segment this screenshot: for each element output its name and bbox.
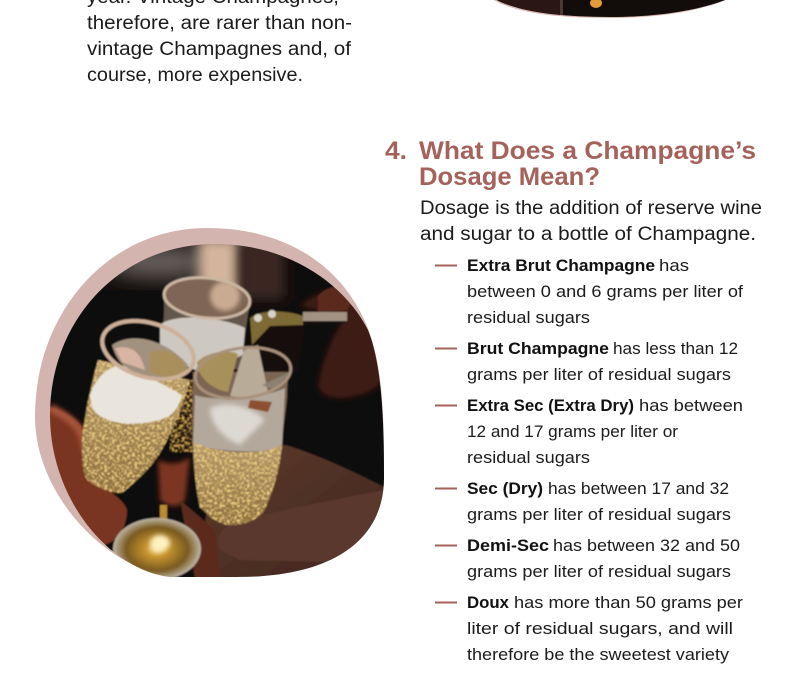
item: Doux: has more than 50 grams per [514,594,744,612]
right glass [192,372,288,525]
paragraph: vintage Champagnes: course, more expensive. [87,65,303,86]
item: Doux [435,594,744,664]
item: Demi-Sec: Demi-Sec [467,537,549,555]
heading: What Does a Champagne’s [419,137,756,165]
paragraph: vintage Champagnes: therefore, are rarer than non- [87,13,352,34]
photo: top cropped blob image [494,0,726,18]
pink blob backing [35,228,384,577]
item: Doux: therefore be the sweetest variety [467,646,730,664]
item: Brut [435,340,738,384]
bottle [249,312,346,374]
item: Demi-Sec: has between 32 and 50 [553,537,740,555]
paragraph: vintage Champagnes [87,0,352,86]
item: Demi-Sec [435,537,740,581]
paragraph: vintage Champagnes: vintage Champagnes and, of [87,39,352,60]
item: Extra Brut: residual sugars [467,309,590,327]
item: Brut: grams per liter of residual sugars [467,366,731,384]
heading [419,137,756,191]
item: Sec [435,480,731,524]
item: Extra Brut: Extra Brut Champagne [467,257,655,275]
item: Doux: liter of residual sugars, and will [467,620,733,638]
item: Sec: grams per liter of residual sugars [467,506,731,524]
heading: Dosage Mean? [419,163,600,191]
backdrop lights [105,248,215,276]
item: Extra Brut: between 0 and 6 grams per liter of [467,283,743,301]
intro text: and sugar to a bottle of Champagne. [420,224,756,245]
intro text: Dosage is the addition of reserve wine [420,198,762,219]
hands [300,289,385,398]
stem and ball [158,504,168,520]
item: Extra Sec [435,397,743,467]
gold sliver between glasses [170,380,194,452]
back glass [162,300,250,370]
item: Brut: has less than 12 [613,340,738,358]
intro text [420,198,762,245]
item: Brut: Brut Champagne [467,340,609,358]
gold inside right rim [197,352,238,392]
item: Sec: has between 17 and 32 [548,480,729,498]
item: Demi-Sec: grams per liter of residual sugars [467,563,731,581]
left glass [82,360,190,493]
item: Doux: Doux [467,594,510,612]
photo: champagne glasses toasting [35,228,390,585]
list: dosage levels [435,257,744,664]
item: Sec: Sec (Dry) [467,480,543,498]
section number: 4. [385,137,407,165]
item: Extra Sec: residual sugars [467,449,590,467]
item: Extra Brut: has [659,257,689,275]
item: Extra Sec: Extra Sec (Extra Dry) [467,397,634,415]
item: Extra Sec: has between [639,397,743,415]
pouring stream [230,345,268,397]
item: Extra Sec: 12 and 17 grams per liter or [467,423,679,441]
item: Extra Brut [435,257,743,327]
